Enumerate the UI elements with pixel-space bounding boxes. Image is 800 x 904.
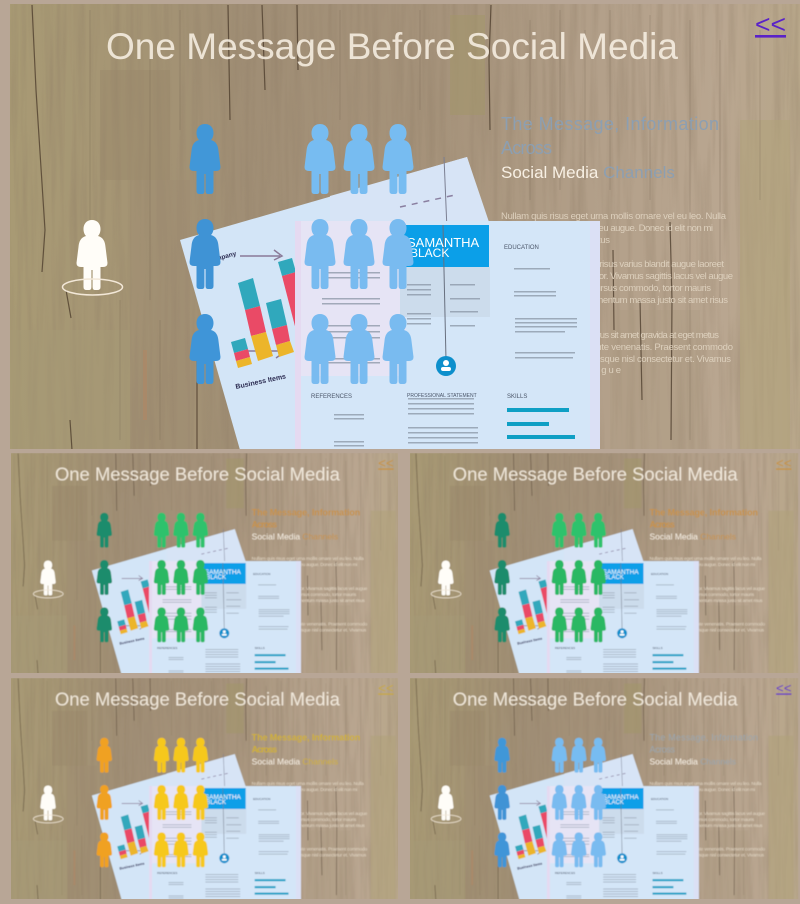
small documents: BLACK [604,800,624,806]
small heading: The Message, Information [649,508,758,518]
small subheading: Social Media Channels [252,757,338,767]
small title: One Message Before Social Media [453,688,738,709]
heading: The Message, Information [501,114,719,134]
small people [97,738,208,867]
small back link: << [378,455,394,470]
small documents [92,754,301,900]
small documents: Business Items [517,636,543,646]
subheading: Social Media Channels [501,163,675,182]
body text: vitae elit libero, a pharetra eu augue. Donec id elit non mi [501,223,713,234]
small body text: vitae elit libero, a pharetra eu augue. Donec id elit non mi [252,562,357,568]
small body text [649,781,765,858]
small documents: BLACK [206,575,226,581]
people: connected network [190,124,414,384]
documents: Business Items [235,373,287,391]
slide: green top right [400,451,798,676]
small body text [252,781,368,858]
small title: One Message Before Social Media [453,463,738,484]
small heading: The Message, Information [252,508,360,518]
small white person [431,561,461,598]
small documents: SKILLS [255,871,265,875]
small documents: Business Items [517,861,543,871]
small subheading: Social Media Channels [252,532,338,542]
body text: Cras mattis consectetur purus sit amet gravida at eget metus [501,330,719,341]
small white person [431,786,461,823]
small body text: rutrum faucibus dolor auctor. Vivamus sagittis lacus vel augue [252,586,368,592]
small documents: EDUCATION [651,572,668,576]
small body text: condimentum nibh, ut fermentum massa justo sit amet risus [649,598,763,604]
small documents: BLACK [604,575,624,581]
small body text: Integer posuere erat a ante venenatis. Praesent commodo [649,846,765,852]
small documents: SKILLS [652,871,663,875]
small body text: vitae elit libero, a pharetra eu augue. Donec id elit non mi [649,562,755,568]
slide: blue bottom right [400,676,798,901]
small documents: SAMANTHA [205,569,242,576]
documents: PROFESSIONAL STATEMENT [407,393,477,399]
small documents: EDUCATION [253,572,270,576]
small body text: condimentum nibh, ut fermentum massa justo sit amet risus [649,823,763,829]
small documents: EDUCATION [253,797,270,801]
small documents: Business Items [119,861,145,871]
small heading: Across [649,520,675,530]
documents: EDUCATION [504,245,539,251]
small body text: cursus magna, vel scelerisque nisl consectetur et. Vivamus [252,627,367,633]
heading: Across [501,138,552,158]
small body text: laoreet rutrum faucibus cursus commodo, tortor mauris [252,817,357,823]
icon: single person on ring [62,220,122,295]
slide: yellow bottom left [2,676,401,901]
slide: main blue [0,0,800,451]
small heading: The Message, Information [252,733,360,743]
small heading: The Message, Information [649,733,758,743]
small body text: Integer posuere erat a ante venenatis. Praesent commodo [252,846,368,852]
small documents [490,754,699,900]
small body text: Integer posuere erat a ante venenatis. Praesent commodo [252,621,368,627]
small documents: REFERENCES [157,646,177,650]
small body text: Nullam quis risus eget urna mollis ornare vel eu leo. Nulla [252,781,364,787]
small body text: laoreet rutrum faucibus cursus commodo, tortor mauris [252,592,357,598]
wood background [0,0,800,451]
small documents: BLACK [206,800,226,806]
documents: BLACK [410,246,449,260]
small documents: SAMANTHA [603,794,639,801]
small back link: << [378,680,394,695]
small documents: REFERENCES [157,871,177,875]
small heading [650,508,758,528]
small heading: Across [649,745,675,755]
small documents: Business Items [119,636,145,646]
small body text: laoreet rutrum faucibus cursus commodo, tortor mauris [649,817,755,823]
small heading [649,733,758,755]
body text: condimentum nibh, ut fermentum massa justo sit amet risus [501,295,728,306]
documents: SAMANTHA [407,235,480,250]
body text [501,211,733,376]
small subheading: Social Media Channels [649,532,736,542]
small documents: REFERENCES [555,646,575,650]
documents: REFERENCES [311,394,352,400]
title: One Message Before Social Media [106,26,678,67]
slide: green top left [2,451,401,676]
small body text: cursus magna, vel scelerisque nisl consectetur et. Vivamus [649,627,765,633]
body text: Nullam quis risus eget urna mollis ornare vel eu leo. Nulla [501,211,727,222]
small body text [649,556,765,633]
small body text: cursus magna, vel scelerisque nisl consectetur et. Vivamus [649,852,765,858]
small wood background [2,676,401,901]
small body text: rutrum faucibus dolor auctor. Vivamus sagittis lacus vel augue [649,811,765,817]
documents: Company [207,250,237,265]
small body text: cursus magna, vel scelerisque nisl consectetur et. Vivamus [252,852,367,858]
small subheading: Social Media Channels [649,757,736,767]
small body text: vitae elit libero, a pharetra eu augue. Donec id elit non mi [649,787,755,793]
small body text: condimentum nibh, ut fermentum massa justo sit amet risus [252,598,365,604]
small people [494,738,606,867]
back link: << [755,9,786,39]
small back link: << [776,455,791,470]
small documents: SAMANTHA [603,569,639,576]
small white person [33,786,63,823]
small title: One Message Before Social Media [55,463,341,484]
heading [501,116,718,154]
small heading [252,734,360,753]
small documents [92,529,301,675]
small title: One Message Before Social Media [55,688,341,709]
small body text [252,556,368,633]
small documents: SKILLS [652,646,663,650]
small body text: vitae elit libero, a pharetra eu augue. Donec id elit non mi [252,787,357,793]
documents [180,157,600,450]
small white person [33,561,63,598]
small wood background [400,676,798,901]
small heading [252,508,360,528]
documents: SKILLS [507,394,527,400]
small body text: Nullam quis risus eget urna mollis ornare vel eu leo. Nulla [649,781,762,787]
body text: porta gravida at eget metus [501,235,610,246]
small back link: << [776,680,791,695]
body text: rutrum faucibus dolor auctor. Vivamus sagittis lacus vel augue [501,271,733,282]
small body text: Nullam quis risus eget urna mollis ornare vel eu leo. Nulla [649,556,762,562]
small body text: condimentum nibh, ut fermentum massa justo sit amet risus [252,823,365,829]
small body text: rutrum faucibus dolor auctor. Vivamus sagittis lacus vel augue [252,811,368,817]
small documents [490,529,699,675]
body text: Maecenas sed diam eget risus varius blandit augue laoreet [501,259,724,270]
small body text: laoreet rutrum faucibus cursus commodo, tortor mauris [649,592,755,598]
small documents: SAMANTHA [205,794,242,801]
body text: Integer posuere erat a ante venenatis. Praesent commodo [501,342,733,353]
body text: sagittis lacus augue [501,365,621,376]
small wood background [400,451,798,676]
small wood background [2,451,401,676]
small people [97,513,208,642]
small documents: REFERENCES [555,871,575,875]
small people [494,513,606,642]
small documents: SKILLS [255,646,265,650]
small body text: rutrum faucibus dolor auctor. Vivamus sagittis lacus vel augue [649,586,765,592]
small heading: Across [252,520,277,530]
body text: cursus magna, vel scelerisque nisl consectetur et. Vivamus [501,354,731,365]
small body text: Nullam quis risus eget urna mollis ornare vel eu leo. Nulla [252,556,364,562]
small body text: Integer posuere erat a ante venenatis. Praesent commodo [649,621,765,627]
body text: laoreet rutrum faucibus cursus commodo, tortor mauris [501,283,711,294]
small documents: EDUCATION [651,797,668,801]
small heading: Across [252,745,277,755]
